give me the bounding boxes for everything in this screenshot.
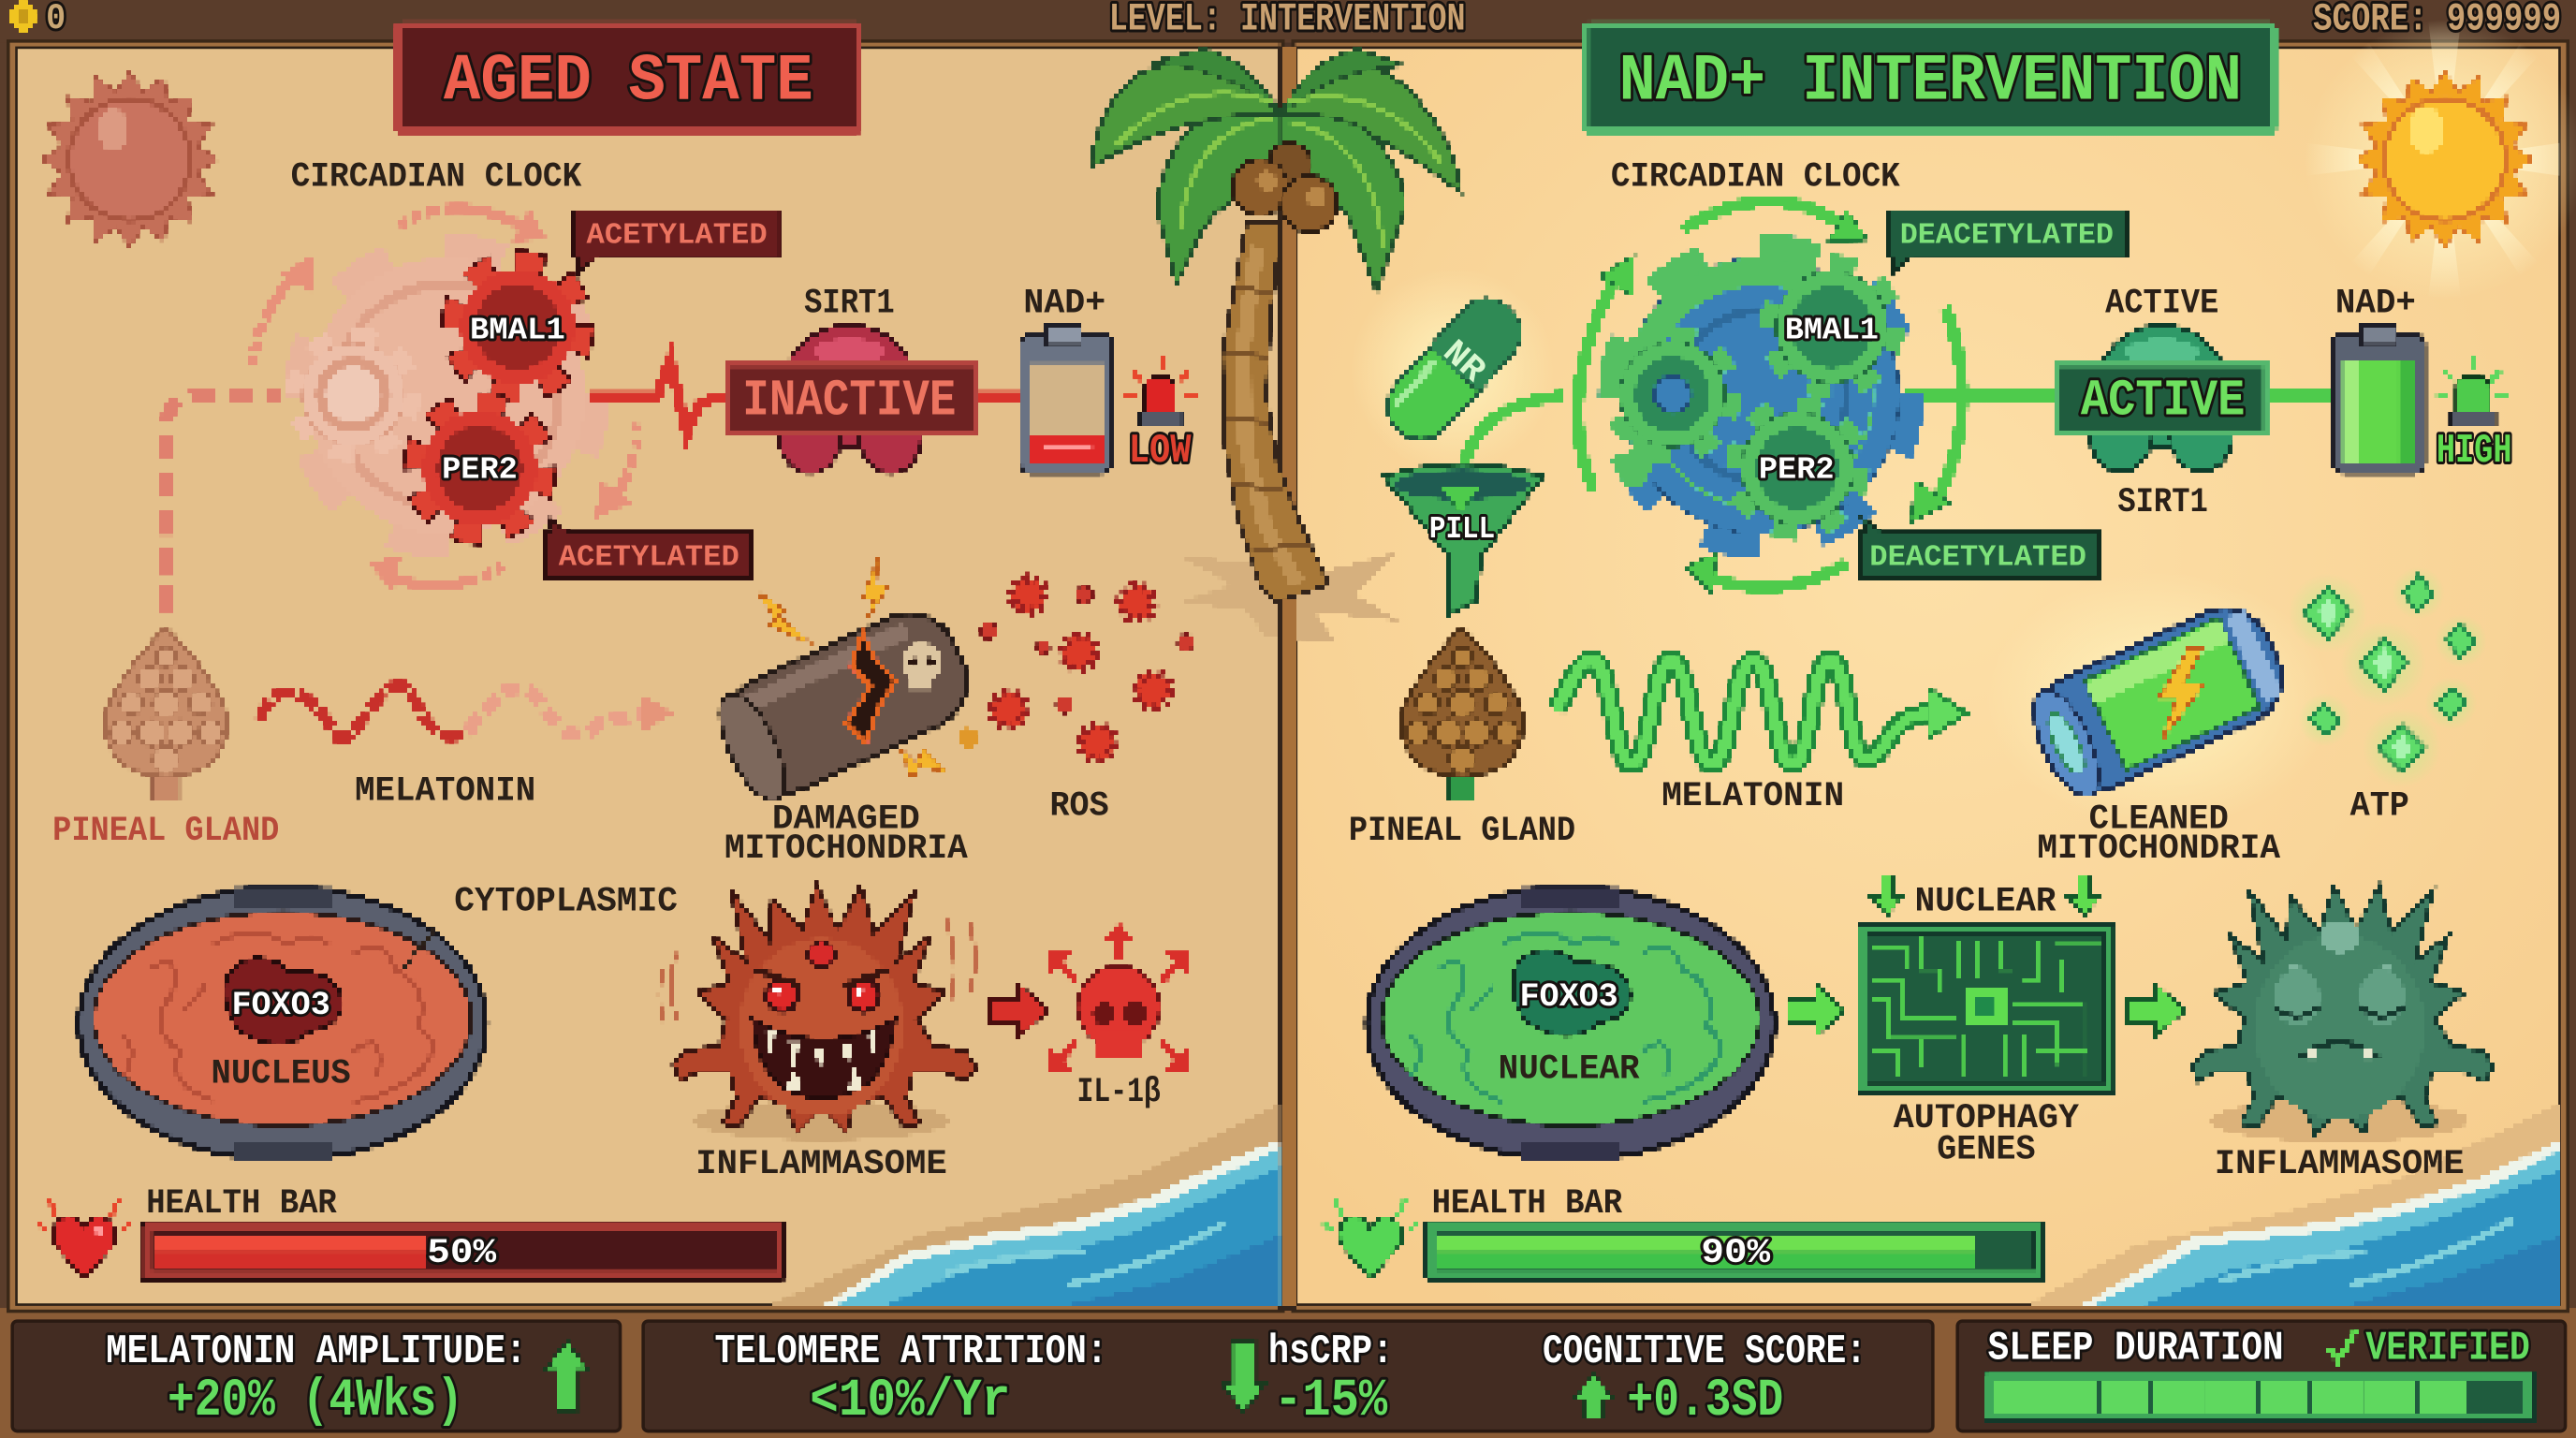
gear: PER2 aged <box>414 403 546 534</box>
label: health bar left: HEALTH BAR <box>146 1184 338 1224</box>
gear: BMAL1 aged <box>452 261 583 392</box>
icon: NR pill <box>1374 286 1533 453</box>
label: cytoplasmic: CYTOPLASMIC <box>454 882 678 921</box>
stat: telomere attrition <box>714 1328 1107 1431</box>
arrow: melatonin up <box>546 1341 588 1412</box>
label: damaged mitochondria: MITOCHONDRIA <box>724 829 969 869</box>
stat: hsCRP: -15% <box>1274 1371 1387 1431</box>
label: SIRT1 right: SIRT1 <box>2117 483 2208 522</box>
label: foxo3 right: FOXO3 <box>1519 978 1618 1016</box>
icon: inflammasome calm <box>2191 886 2494 1142</box>
label: circadian clock left: CIRCADIAN CLOCK <box>291 157 582 197</box>
tags: acetylated <box>546 211 781 579</box>
icon: IL-1 beta skull burst <box>1048 923 1190 1070</box>
label: circadian clock right: CIRCADIAN CLOCK <box>1611 157 1901 197</box>
icon: damaged mitochondria <box>707 555 983 811</box>
label: pill: PILL <box>1429 512 1495 548</box>
label: acetylated top: ACETYLATED <box>587 220 768 253</box>
health bar 50% <box>141 1223 783 1280</box>
icon: autophagy genes chip <box>1858 923 2115 1093</box>
gear: left green <box>1614 335 1732 453</box>
icon: bright sun <box>2356 70 2533 248</box>
panel: NAD+ intervention background <box>1293 41 2568 1312</box>
pale clock gear: big <box>299 248 594 544</box>
stat: cognitive score: +0.3SD <box>1627 1371 1783 1431</box>
arrow: chip to monster <box>2128 984 2185 1036</box>
icon: red alarm <box>1123 355 1199 426</box>
box: active <box>2058 365 2265 433</box>
stat: cognitive score: COGNITIVE SCORE: <box>1543 1328 1866 1375</box>
icon: cytoplasm nucleus aged <box>79 888 487 1160</box>
hud panels <box>12 1321 2566 1431</box>
melatonin wave strong <box>1556 661 1967 764</box>
label: SIRT1 left: SIRT1 <box>804 284 895 323</box>
label: deacetylated top: DEACETYLATED <box>1900 220 2114 253</box>
label: pineal gland right: PINEAL GLAND <box>1349 812 1575 851</box>
label: active box: ACTIVE <box>2081 373 2245 430</box>
water: right shore <box>2029 1104 2559 1305</box>
stat: hsCRP: hsCRP: <box>1268 1328 1393 1375</box>
label: melatonin right: MELATONIN <box>1661 777 1844 816</box>
icon: funnel <box>1383 464 1543 614</box>
label: damaged mitochondria: DAMAGED <box>772 800 920 840</box>
arrow: cognitive up <box>1573 1375 1615 1418</box>
health bar 90% <box>1426 1223 2043 1280</box>
label: BMAL1 right: BMAL1 <box>1785 314 1879 349</box>
icon: dim sun <box>41 70 218 248</box>
label: nuclear in nucleus: NUCLEAR <box>1499 1049 1640 1089</box>
icon: low battery <box>1020 326 1112 473</box>
label: nucleus: NUCLEUS <box>212 1055 351 1094</box>
stat: melatonin amplitude: +20% (4Wks) <box>168 1371 463 1431</box>
panel: aged state background <box>8 41 1283 1312</box>
gear: BMAL1 active <box>1769 265 1895 389</box>
arrow: nucleus to chip <box>1788 984 1845 1036</box>
label: NAD+ right: NAD+ <box>2335 284 2416 323</box>
pale clock gear: small <box>296 337 411 452</box>
arrow: clock flows right <box>1578 201 1962 594</box>
label: pineal gland left: PINEAL GLAND <box>52 812 279 851</box>
icon: green alarm <box>2437 355 2510 426</box>
sun glow rays <box>2305 20 2576 299</box>
stat: telomere attrition: <10%/Yr <box>810 1371 1010 1431</box>
icon: pineal gland healthy <box>1401 627 1524 800</box>
label: PER2 right: PER2 <box>1759 453 1835 489</box>
stat: cognitive score <box>1543 1328 1866 1431</box>
icon: sirt1 enzyme active <box>2089 326 2232 472</box>
arrow: monster to skull <box>990 984 1048 1036</box>
bottom HUD frame <box>0 1308 2576 1438</box>
melatonin wave weak <box>259 685 674 739</box>
top status bar <box>0 0 2576 43</box>
icon: cleaned mitochondria battery <box>2021 594 2297 806</box>
icon: coin <box>10 2 37 31</box>
arrow: hsCRP down <box>1222 1341 1265 1413</box>
dashed pathway from pineal <box>166 396 283 611</box>
arrow: pill to funnel <box>1441 396 1562 513</box>
water: left shore <box>772 1104 1280 1305</box>
label: deacetylated bottom: DEACETYLATED <box>1869 542 2086 575</box>
label: inactive: INACTIVE <box>742 373 956 430</box>
label: ros: ROS <box>1050 787 1109 827</box>
label: autophagy genes: GENES <box>1937 1130 2036 1169</box>
label: inflammasome right: INFLAMMASOME <box>2215 1145 2465 1184</box>
label: 50 percent: 50% <box>427 1234 497 1273</box>
title: NAD+ intervention: NAD+ INTERVENTION <box>1619 45 2242 119</box>
icon: foxo3 blob healthy <box>1513 949 1630 1035</box>
label: melatonin left: MELATONIN <box>355 772 535 812</box>
glow behind pill, battery and crystals <box>1351 268 2487 829</box>
icon: inflammasome angry <box>660 886 976 1140</box>
label: BMAL1 left: BMAL1 <box>470 314 565 349</box>
arrows: nuclear entry <box>1871 875 2100 916</box>
center divider <box>1280 46 1296 1308</box>
label: acetylated bottom: ACETYLATED <box>559 542 739 575</box>
icon: palm tree <box>1090 50 1460 601</box>
label: cleaned mitochondria <box>2037 800 2281 869</box>
label: cleaned mitochondria: CLEANED <box>2089 800 2229 840</box>
label: autophagy genes: AUTOPHAGY <box>1894 1099 2080 1138</box>
label: 90 percent: 90% <box>1701 1234 1771 1273</box>
icon: green heart <box>1323 1199 1418 1278</box>
label: PER2 left: PER2 <box>442 453 518 489</box>
connector: active line <box>1906 392 2333 399</box>
sleep duration bar <box>1984 1372 2535 1421</box>
arrows around left clock <box>253 208 637 592</box>
label: autophagy genes <box>1894 1099 2080 1169</box>
palm shadow <box>1179 552 1398 640</box>
stat: melatonin amplitude: MELATONIN AMPLITUDE: <box>106 1328 527 1375</box>
icon: full battery <box>2333 326 2425 473</box>
icon: pineal gland aged <box>105 627 227 800</box>
gear: PER2 active <box>1734 406 1860 531</box>
icon: blue clock gear <box>1614 248 1909 544</box>
title plate: aged state <box>398 24 859 131</box>
tags: deacetylated <box>1860 211 2128 579</box>
label: inflammasome left: INFLAMMASOME <box>695 1145 947 1184</box>
icon: sirt1 enzyme inactive <box>779 326 922 473</box>
label: health bar right: HEALTH BAR <box>1432 1184 1623 1224</box>
label: IL-1 beta: IL-1β <box>1076 1073 1161 1112</box>
label: cleaned mitochondria: MITOCHONDRIA <box>2037 829 2281 869</box>
label: NAD+ left: NAD+ <box>1023 284 1105 323</box>
label: high: HIGH <box>2437 428 2512 475</box>
label: foxo3 left: FOXO3 <box>231 987 330 1024</box>
icon: ros particles <box>981 579 1194 759</box>
connector: sirt1 line and zigzag <box>588 360 1022 433</box>
icon: foxo3 blob aged <box>225 958 342 1044</box>
label: NR: NR <box>1434 333 1493 391</box>
label: ATP: ATP <box>2350 787 2409 827</box>
icon: red heart <box>37 1199 131 1278</box>
stat: telomere attrition: TELOMERE ATTRITION: <box>714 1328 1107 1375</box>
title: aged state: AGED STATE <box>444 45 813 119</box>
label: active top: ACTIVE <box>2105 284 2218 323</box>
stat: sleep duration: SLEEP DURATION <box>1988 1325 2284 1372</box>
stat: melatonin amplitude <box>106 1328 527 1431</box>
icon: ATP crystals <box>2305 575 2476 770</box>
title plate: NAD+ intervention <box>1586 24 2274 131</box>
label: nuclear top: NUCLEAR <box>1915 882 2056 921</box>
box: inactive <box>726 365 976 433</box>
label: damaged mitochondria <box>724 800 969 869</box>
label: low: LOW <box>1129 428 1192 475</box>
stat: hsCRP <box>1268 1328 1393 1431</box>
icon: verified check <box>2328 1331 2356 1360</box>
stat: verified: VERIFIED <box>2365 1325 2530 1372</box>
icon: nucleus healthy <box>1367 888 1775 1160</box>
